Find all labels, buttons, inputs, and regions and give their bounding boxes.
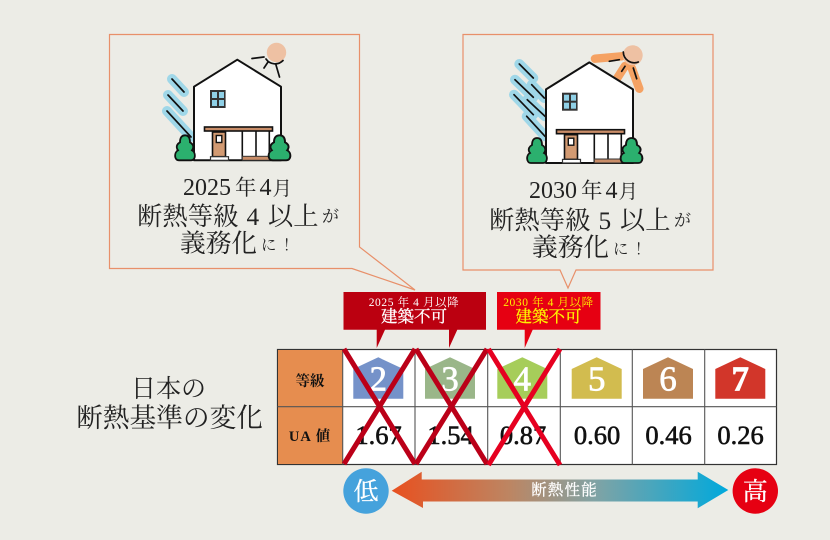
grade 7: 7 <box>732 360 749 398</box>
text: 2025 requirement: 義務化 <box>180 229 257 258</box>
text: 2025 requirement <box>137 175 339 258</box>
text: 2025 requirement: に <box>261 237 277 254</box>
UA values: 0.26 <box>717 420 764 450</box>
grade 4: 4 <box>514 360 531 398</box>
text: 2030 requirement: 断熱等級 <box>489 207 591 235</box>
text: 2025 requirement: 以上 <box>268 203 319 231</box>
grade 6 <box>643 357 693 399</box>
text: 2025 requirement: 月 <box>272 179 292 200</box>
badge: low <box>343 468 389 514</box>
text: 2030 requirement: 義務化 <box>532 233 609 262</box>
text: 2030 requirement: が <box>674 211 691 230</box>
title <box>76 375 263 433</box>
table: insulation grades and UA values <box>278 349 776 465</box>
callout: 2030 not allowed <box>497 292 600 348</box>
arrow: insulation performance: 断熱性能 <box>531 481 598 499</box>
grade 7 <box>715 357 765 399</box>
text: 2025 requirement: が <box>322 207 339 226</box>
grade 3 <box>425 357 475 399</box>
UA values: 0.87 <box>500 420 546 450</box>
text: 2030 requirement: 年 <box>581 179 603 203</box>
text: 2030 requirement: 5 <box>598 207 611 235</box>
UA values: 0.46 <box>645 420 692 450</box>
text: 2030 requirement: 4 <box>606 178 618 204</box>
badge: low: 低 <box>353 478 379 506</box>
row headers <box>278 350 343 464</box>
text: 2030 requirement <box>489 178 691 262</box>
row headers: UA 値 <box>289 427 331 445</box>
UA values <box>355 420 764 450</box>
callout: 2030 not allowed: 2030 年 4 月以降 <box>503 295 594 309</box>
badge: high: 高 <box>743 478 768 506</box>
grade 3: 3 <box>441 360 459 398</box>
callout: 2025 not allowed: 2025 年 4 月以降 <box>369 295 459 309</box>
grade 2 <box>353 357 403 399</box>
text: 2030 requirement: ！ <box>631 241 647 258</box>
text: 2025 requirement: ！ <box>279 237 295 254</box>
text: 2025 requirement: 4 <box>260 175 272 201</box>
panel: 2030 callout <box>463 34 713 288</box>
text: 2025 requirement: 2025 <box>183 175 231 201</box>
icon: house with heavy rain and strong sun <box>514 45 643 163</box>
cross marks over grades 2 to 4 <box>344 349 560 465</box>
grade 5 <box>572 357 622 399</box>
title: 断熱基準の変化 <box>76 403 263 433</box>
icon: house with light rain and sun <box>167 43 290 160</box>
grade 4 <box>497 357 547 399</box>
text: 2030 requirement: に <box>613 241 629 258</box>
grade 2: 2 <box>370 360 387 398</box>
callout: 2025 not allowed: 建築不可 <box>381 307 447 326</box>
UA values: 1.67 <box>355 420 402 450</box>
text: 2025 requirement: 4 <box>246 203 260 231</box>
text: 2030 requirement: 以上 <box>620 207 671 235</box>
UA values: 1.54 <box>427 420 474 450</box>
text: 2030 requirement: 2030 <box>529 178 577 204</box>
grade 5: 5 <box>588 360 605 398</box>
title: 日本の <box>131 375 206 403</box>
UA values: 0.60 <box>574 420 620 450</box>
badge: high <box>733 468 778 514</box>
text: 2030 requirement: 月 <box>618 182 638 203</box>
callout: 2025 not allowed <box>344 292 486 348</box>
row headers: 等級 <box>296 372 325 390</box>
text: 2025 requirement: 断熱等級 <box>137 203 239 231</box>
callout: 2030 not allowed: 建築不可 <box>516 307 582 326</box>
text: 2025 requirement: 年 <box>235 176 257 200</box>
panel: 2025 callout <box>110 34 415 290</box>
arrow: insulation performance <box>392 472 728 508</box>
grade 6: 6 <box>659 360 677 398</box>
